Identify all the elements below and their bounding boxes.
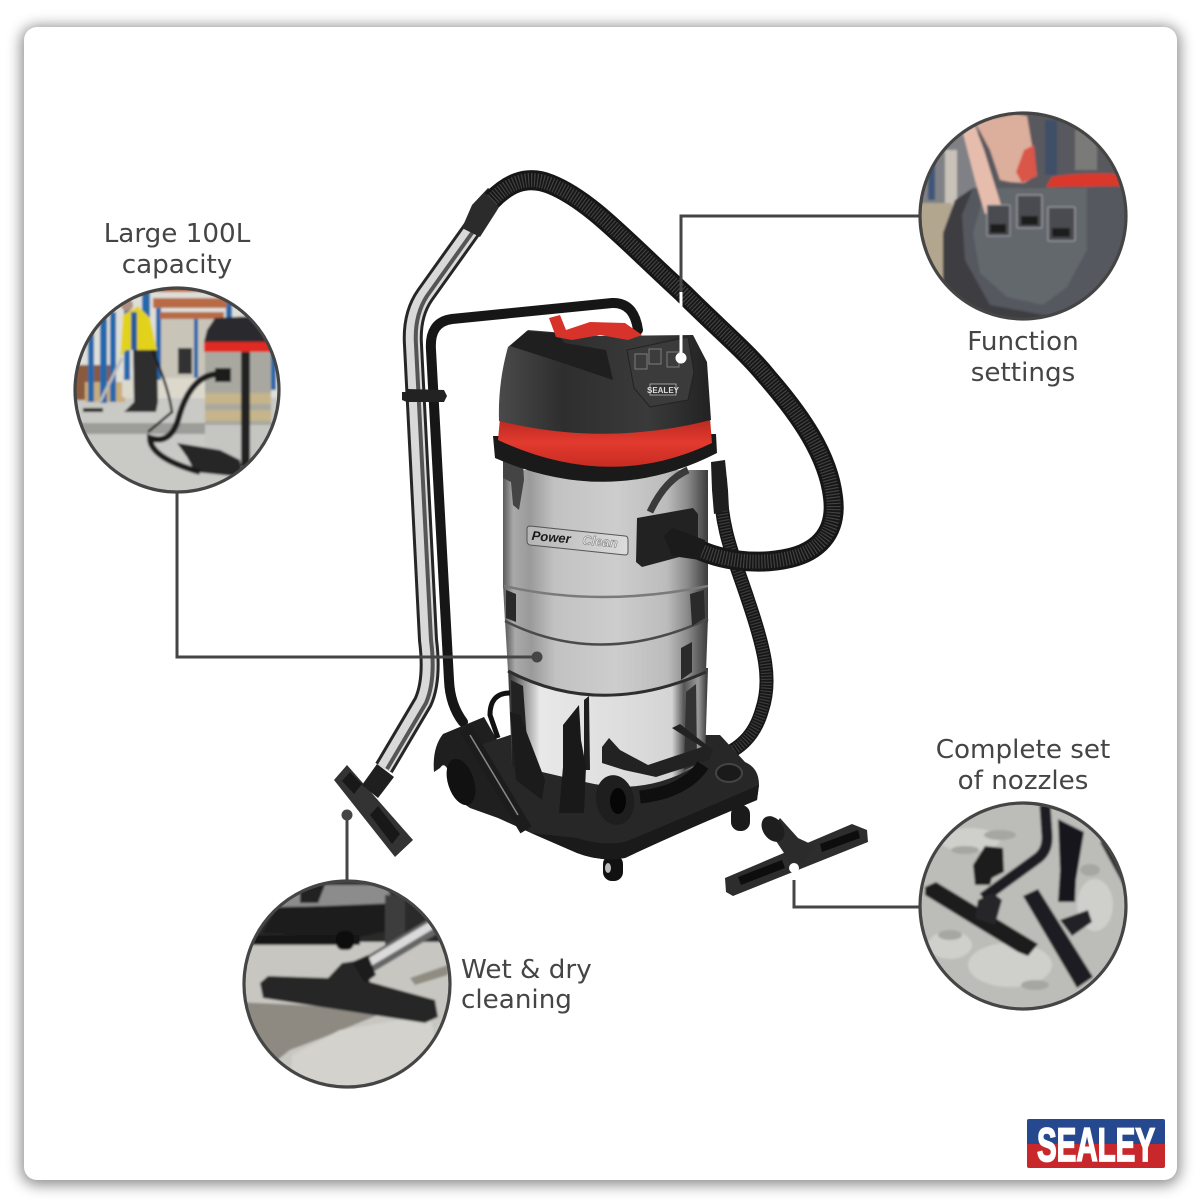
right floor nozzle (725, 812, 868, 896)
heading: Large 100L capacity: capacity (122, 250, 232, 280)
control panel (627, 337, 694, 407)
floor nozzle stowed (602, 724, 713, 777)
leader line: nozzles (789, 863, 919, 907)
wheel housing (434, 717, 531, 833)
PowerClean badge (527, 526, 628, 555)
nozzle collar (362, 764, 394, 798)
side reflections (506, 590, 705, 680)
main hose (492, 180, 834, 562)
reflection left (511, 680, 530, 782)
frame brace (465, 728, 526, 830)
crevice tool (559, 705, 586, 813)
drum lower section (508, 668, 708, 787)
heading: Wet & dry cleaning: Wet & dry (461, 955, 592, 985)
nozzle slot (342, 772, 362, 794)
black handle frame (431, 303, 638, 722)
base tray (480, 735, 759, 859)
photo: warehouse (73, 286, 281, 494)
power cable (490, 693, 510, 738)
collar ring (493, 434, 717, 482)
leader line: switches (676, 216, 919, 364)
round brush (592, 772, 638, 828)
tool holder (465, 693, 713, 830)
latch (503, 458, 524, 510)
hose inlet box (636, 508, 698, 567)
tray arc (640, 765, 703, 797)
heading: Function settings: Function (967, 327, 1079, 357)
slot (738, 860, 785, 885)
chrome wand (384, 225, 477, 769)
heading: Large 100L capacity (104, 219, 251, 280)
callout: wet and dry cleaning (236, 810, 592, 1095)
slot (820, 830, 860, 852)
lid top recess (510, 331, 613, 380)
drum rib (505, 619, 708, 645)
heading: Function settings: settings (971, 358, 1075, 388)
switches (635, 349, 679, 369)
left holder (510, 712, 545, 800)
steel drum (503, 470, 708, 787)
photo: nozzle set (918, 801, 1128, 1011)
rear hose (716, 478, 767, 758)
brace highlight (470, 735, 518, 815)
frame clamp (402, 389, 447, 402)
tray (434, 717, 759, 881)
neck (770, 818, 815, 862)
red handle (549, 315, 642, 340)
wand cuff (462, 188, 504, 237)
drum rib (508, 671, 706, 695)
heading: Wet & dry cleaning (461, 955, 592, 1015)
callout: large 100L (60, 219, 542, 662)
photo: switch panel (918, 111, 1128, 321)
heading: Complete set of nozzles: Complete set (936, 735, 1110, 765)
nozzle slot (370, 806, 400, 844)
lid dome (499, 330, 711, 434)
rear caster (731, 805, 750, 831)
heading: Function settings (967, 327, 1079, 388)
leader line: capacity (177, 492, 542, 662)
cylinder clip (584, 696, 590, 770)
vacuum cleaner product (334, 180, 868, 896)
front caster (603, 855, 623, 881)
left floor nozzle (334, 764, 413, 857)
heading: Large 100L capacity: Large 100L (104, 219, 251, 249)
callout: complete set of nozzles (789, 735, 1134, 1017)
drum rib (504, 586, 708, 597)
reflection right (684, 684, 697, 770)
photo: wet floor cleaning (242, 879, 452, 1089)
collar (757, 812, 789, 846)
heading: Wet & dry cleaning: cleaning (461, 985, 572, 1015)
rear wheel (441, 755, 481, 809)
badge text: Power (531, 528, 572, 546)
heading: Complete set of nozzles: of nozzles (958, 766, 1088, 796)
tray cup recess (716, 764, 742, 782)
callout: function settings (676, 105, 1134, 388)
badge text (531, 528, 618, 550)
drum mid-upper section (503, 585, 708, 645)
heading: Complete set of nozzles (936, 735, 1110, 796)
hose cuff (664, 528, 705, 560)
rear hose connector (711, 460, 729, 514)
red band (498, 418, 712, 467)
leader line: wet and dry (342, 810, 352, 881)
brush opening (610, 788, 626, 814)
SEALEY tag: SEALEY (647, 386, 680, 395)
drum upper section (503, 470, 708, 598)
inner hose behind drum (650, 470, 688, 512)
tray lower lip (531, 785, 759, 859)
drum middle section (505, 618, 708, 695)
badge text: Clean (582, 532, 618, 550)
